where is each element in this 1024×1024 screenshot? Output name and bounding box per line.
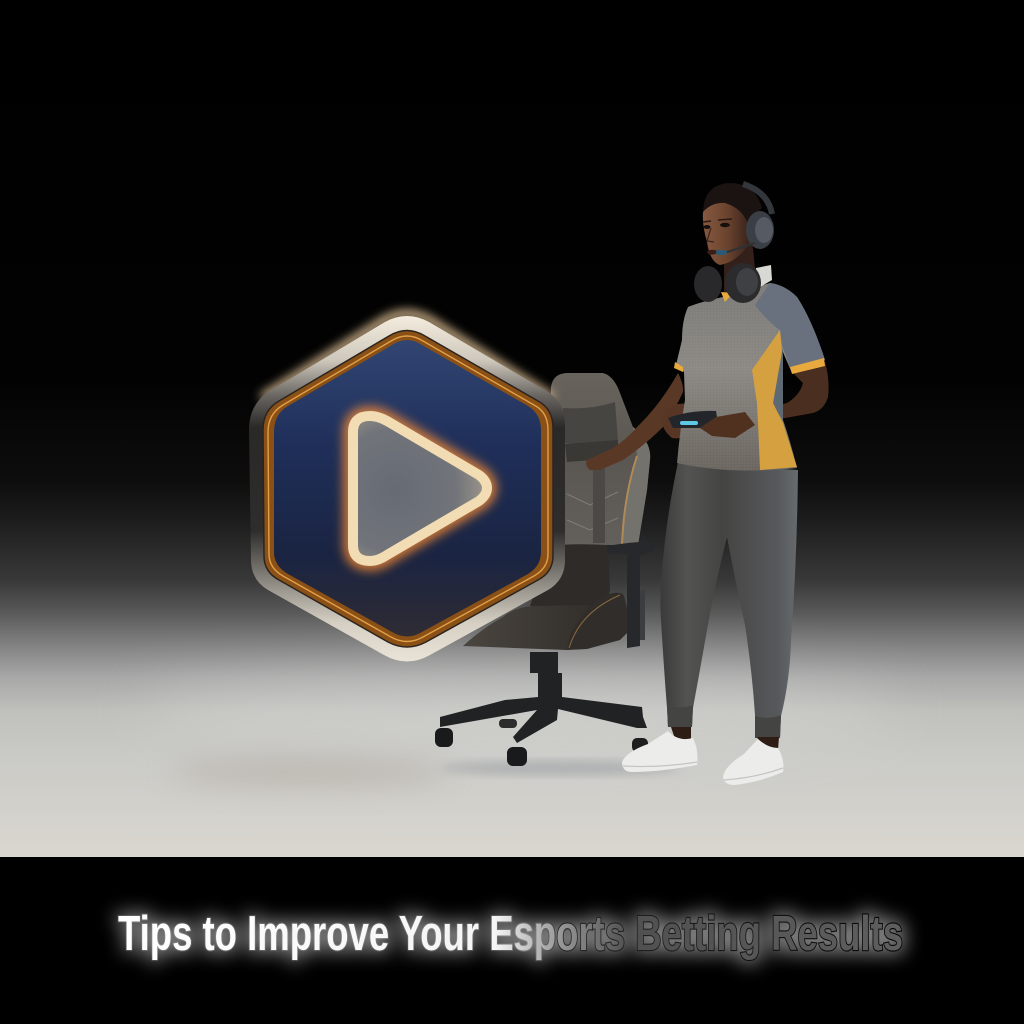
esports player bbox=[586, 183, 829, 785]
sleeve cuffs bbox=[790, 358, 825, 374]
gaming chair bbox=[435, 373, 654, 766]
chair seat bbox=[463, 605, 600, 650]
copper ring bbox=[263, 330, 553, 647]
neck bbox=[724, 240, 758, 304]
chair base and casters bbox=[440, 652, 647, 743]
hair bbox=[703, 183, 762, 224]
chair backrest bbox=[545, 373, 650, 545]
navy face bbox=[274, 340, 541, 636]
right hand bbox=[700, 412, 755, 438]
left arm bbox=[586, 373, 683, 470]
sneakers bbox=[622, 731, 783, 785]
chair pillow bbox=[563, 402, 618, 444]
badge glow bbox=[262, 314, 552, 398]
jersey sleeve panel bbox=[755, 283, 825, 373]
trousers bbox=[660, 462, 798, 738]
jersey side panel bbox=[772, 348, 783, 420]
jersey yellow panel bbox=[752, 330, 797, 470]
headset bbox=[716, 184, 774, 255]
chair lumbar cushion bbox=[530, 544, 610, 606]
ankles bbox=[671, 727, 779, 750]
right arm bbox=[703, 362, 829, 437]
jersey bbox=[676, 283, 825, 471]
metal frame bbox=[249, 316, 565, 662]
play triangle bbox=[353, 416, 487, 561]
game controller bbox=[668, 411, 717, 428]
hexagon play badge bbox=[249, 314, 565, 662]
chair armrest bbox=[607, 535, 654, 648]
face bbox=[703, 200, 752, 265]
neck headphones bbox=[694, 263, 772, 303]
left hand bbox=[662, 404, 692, 438]
